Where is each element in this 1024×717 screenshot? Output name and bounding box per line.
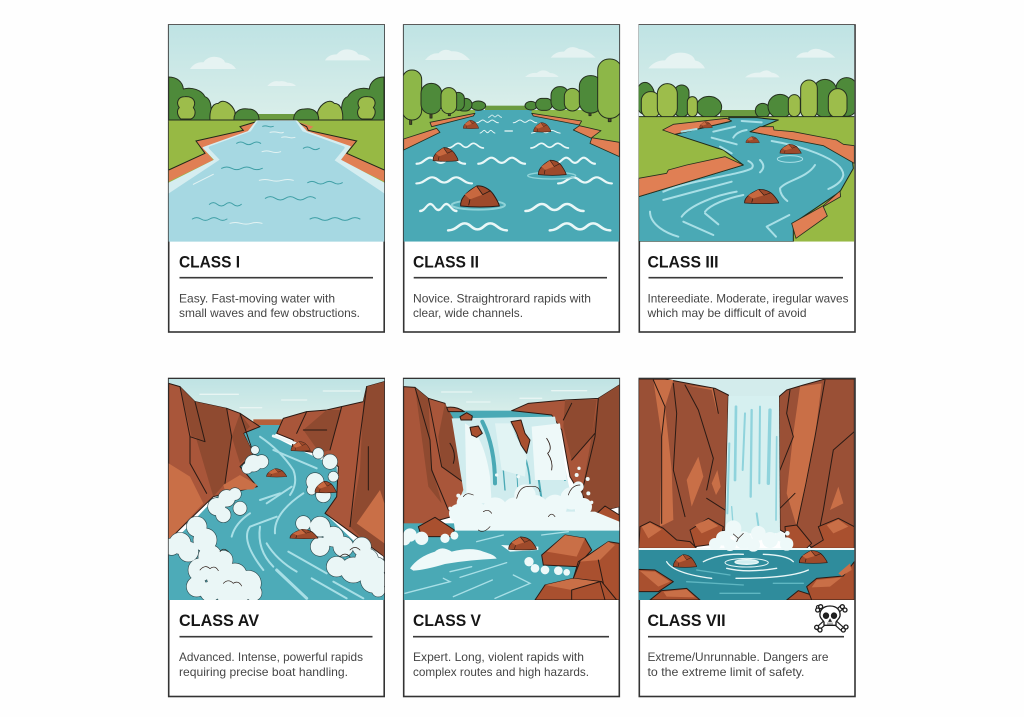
panel: Class II [402, 25, 622, 332]
description: Intereediate. Moderate, iregular waves [648, 292, 848, 306]
illustration: towering waterfall and whirlpool [639, 379, 854, 600]
description: which may be difficult of avoid [647, 306, 806, 320]
description: clear, wide channels. [413, 306, 523, 320]
panel: Class III [635, 25, 857, 332]
illustration: canyon rapids [163, 379, 386, 603]
description: Novice. Straightrorard rapids with [413, 292, 591, 306]
card frame [639, 378, 855, 696]
heading: CLASS III [648, 252, 718, 272]
illustration: choppy river with rocks [402, 25, 622, 242]
panel: Class I [169, 25, 384, 332]
heading: CLASS VII [648, 611, 726, 630]
description: to the extreme limit of safety. [648, 665, 804, 679]
heading: CLASS I [179, 252, 240, 272]
description: Easy. Fast-moving water with [179, 292, 335, 306]
description: small waves and few obstructions. [179, 306, 360, 320]
description: Expert. Long, violent rapids with [413, 650, 584, 664]
illustration: violent waterfall rapids [400, 379, 619, 600]
description: Advanced. Intense, powerful rapids [179, 650, 363, 664]
card frame [169, 25, 384, 332]
card frame [404, 378, 619, 696]
card frame [404, 25, 619, 332]
illustration: calm wide river [169, 25, 384, 242]
heading: CLASS V [413, 611, 482, 630]
heading: CLASS AV [179, 611, 260, 630]
icon: skull and crossbones [815, 605, 848, 632]
card frame [169, 378, 384, 696]
foam clusters [163, 446, 386, 603]
card frame [639, 25, 855, 332]
heading: CLASS II [413, 252, 479, 272]
description: Extreme/Unrunnable. Dangers are [648, 650, 829, 664]
panel: Class VII [639, 378, 855, 696]
illustration: winding river [635, 25, 857, 242]
panel: Class V [400, 378, 619, 696]
description: requiring precise boat handling. [179, 665, 348, 679]
description: complex routes and high hazards. [413, 665, 589, 679]
panel: Class IV [163, 378, 386, 696]
